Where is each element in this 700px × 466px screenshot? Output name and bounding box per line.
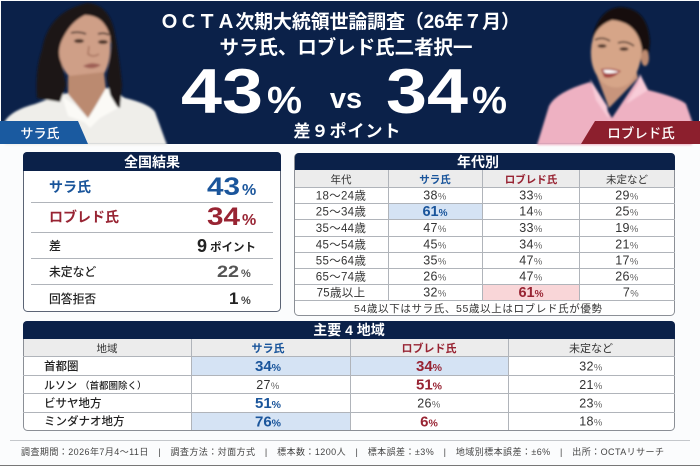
- result: margin: ポイント: [210, 241, 256, 254]
- age rows: 61%: [518, 285, 544, 301]
- result: margin: [49, 236, 256, 256]
- result: refused: 回答拒否: [49, 292, 96, 306]
- table header: 未定など: [606, 174, 648, 186]
- age rows: 65〜74歳: [316, 270, 366, 284]
- result: undecided: [49, 262, 251, 281]
- margin: 9 points: 差９ポイント: [294, 121, 400, 141]
- result: margin: 9: [197, 236, 207, 256]
- region rows: 首都圏: [44, 359, 78, 373]
- result: Sara: [49, 173, 256, 201]
- region rows: 6%: [420, 414, 438, 430]
- result: Robredo: 34: [207, 203, 240, 231]
- region rows: ビサヤ地方: [44, 396, 102, 410]
- panel: by age: 年代別: [457, 154, 499, 170]
- portrait: Robredo: [537, 7, 692, 145]
- label: Sara: [0, 121, 88, 144]
- title: サラ氏、ロブレド氏二者択一: [220, 36, 472, 59]
- age rows: 33%: [519, 221, 543, 235]
- region table header: [96, 341, 613, 355]
- region rows: （首都圏除く）: [80, 380, 147, 392]
- region rows: 23%: [579, 396, 603, 410]
- table header: 年代: [330, 173, 352, 186]
- result: Sara: 43: [207, 173, 240, 201]
- result: undecided: %: [241, 268, 251, 280]
- age rows: 55〜64歳: [316, 254, 366, 268]
- region rows: 27%: [256, 378, 280, 392]
- headline: 43% vs 34%: %: [267, 80, 302, 122]
- age rows: 18〜24歳: [316, 190, 366, 202]
- age rows: 26%: [423, 270, 447, 284]
- region rows: [44, 358, 603, 430]
- region table header: サラ氏: [252, 341, 284, 355]
- region rows: 76%: [255, 414, 282, 430]
- region rows: 21%: [579, 378, 603, 392]
- age rows: 75歳以上: [317, 286, 365, 300]
- age rows: 35%: [423, 254, 447, 268]
- age rows: [316, 188, 639, 301]
- age rows: 25〜34歳: [316, 206, 366, 218]
- table header: [330, 173, 648, 186]
- title: [160, 10, 520, 59]
- result: Sara: %: [242, 182, 256, 199]
- region rows: 51%: [255, 395, 282, 412]
- label: Robredo: ロブレド氏: [607, 125, 675, 141]
- result: Robredo: [49, 203, 256, 231]
- header banner: [0, 1, 700, 145]
- age rows: 47%: [423, 221, 447, 235]
- age rows: 14%: [519, 204, 543, 218]
- headline: 43% vs 34%: vs: [330, 83, 362, 115]
- result: margin: 差: [49, 239, 61, 253]
- age rows: 21%: [615, 238, 639, 252]
- table header: ロブレド氏: [505, 173, 558, 186]
- region rows: 34%: [255, 358, 282, 375]
- age rows: 38%: [423, 188, 447, 202]
- region rows: 26%: [417, 396, 441, 410]
- result: Robredo: ロブレド氏: [49, 209, 119, 225]
- footer: survey details: 調査期間：2026年7月4〜11日 | 調査方法：対面方式 | 標本数：1200人 | 標本誤差：±3% | 地域別標本誤差：±6% | 出所：OCTAリサーチ: [21, 446, 664, 457]
- result: refused: %: [241, 295, 251, 307]
- region rows: 32%: [579, 360, 603, 374]
- age rows: 34%: [519, 238, 543, 252]
- region rows: 18%: [579, 414, 603, 428]
- headline: 43% vs 34%: %: [472, 80, 507, 122]
- label: Robredo: [581, 121, 700, 144]
- region table header: 地域: [96, 342, 118, 355]
- region table header: ロブレド氏: [402, 341, 456, 355]
- result: undecided: 22: [217, 262, 239, 281]
- region rows: ミンダナオ地方: [44, 414, 124, 428]
- age rows: 19%: [615, 221, 639, 235]
- age rows: 26%: [615, 270, 639, 284]
- result: Robredo: %: [242, 212, 256, 229]
- age rows: 25%: [615, 204, 639, 218]
- age rows: 32%: [423, 286, 447, 300]
- age rows: 17%: [615, 254, 639, 268]
- headline: 43% vs 34%: 34: [386, 57, 468, 127]
- region rows: ルソン: [44, 380, 77, 392]
- panel: national results: [23, 152, 281, 312]
- age rows: 7%: [623, 286, 639, 300]
- result: refused: 1: [229, 289, 238, 308]
- age table note: 54歳以下はサラ氏、55歳以上はロブレド氏が優勢: [354, 302, 602, 315]
- region rows: 34%: [416, 358, 443, 375]
- table header: サラ氏: [419, 173, 451, 186]
- age rows: 29%: [615, 188, 639, 202]
- panel: by age: [294, 153, 675, 316]
- panel: four regions: 主要 4 地域: [313, 322, 385, 338]
- age rows: 45〜54歳: [316, 238, 366, 252]
- result: undecided: 未定など: [49, 265, 96, 279]
- age rows: 47%: [519, 270, 543, 284]
- age rows: 33%: [519, 188, 543, 202]
- panel: four regions: [23, 321, 675, 430]
- age rows: 35〜44歳: [316, 222, 366, 235]
- headline: 43% vs 34%: 43: [181, 57, 263, 127]
- region rows: 51%: [416, 376, 443, 394]
- portrait: Sara: [5, 3, 167, 145]
- headline: 43% vs 34%: [181, 57, 507, 127]
- label: Sara: サラ氏: [20, 126, 60, 141]
- age rows: 61%: [422, 204, 448, 220]
- title: ＯＣＴＡ次期大統領世論調査（26年７月）: [160, 10, 520, 33]
- result: refused: [49, 289, 251, 308]
- region table header: 未定など: [569, 342, 613, 355]
- result: Sara: サラ氏: [49, 179, 91, 195]
- panel: national results: 全国結果: [124, 154, 180, 170]
- age rows: 47%: [519, 254, 543, 268]
- age rows: 45%: [423, 238, 447, 252]
